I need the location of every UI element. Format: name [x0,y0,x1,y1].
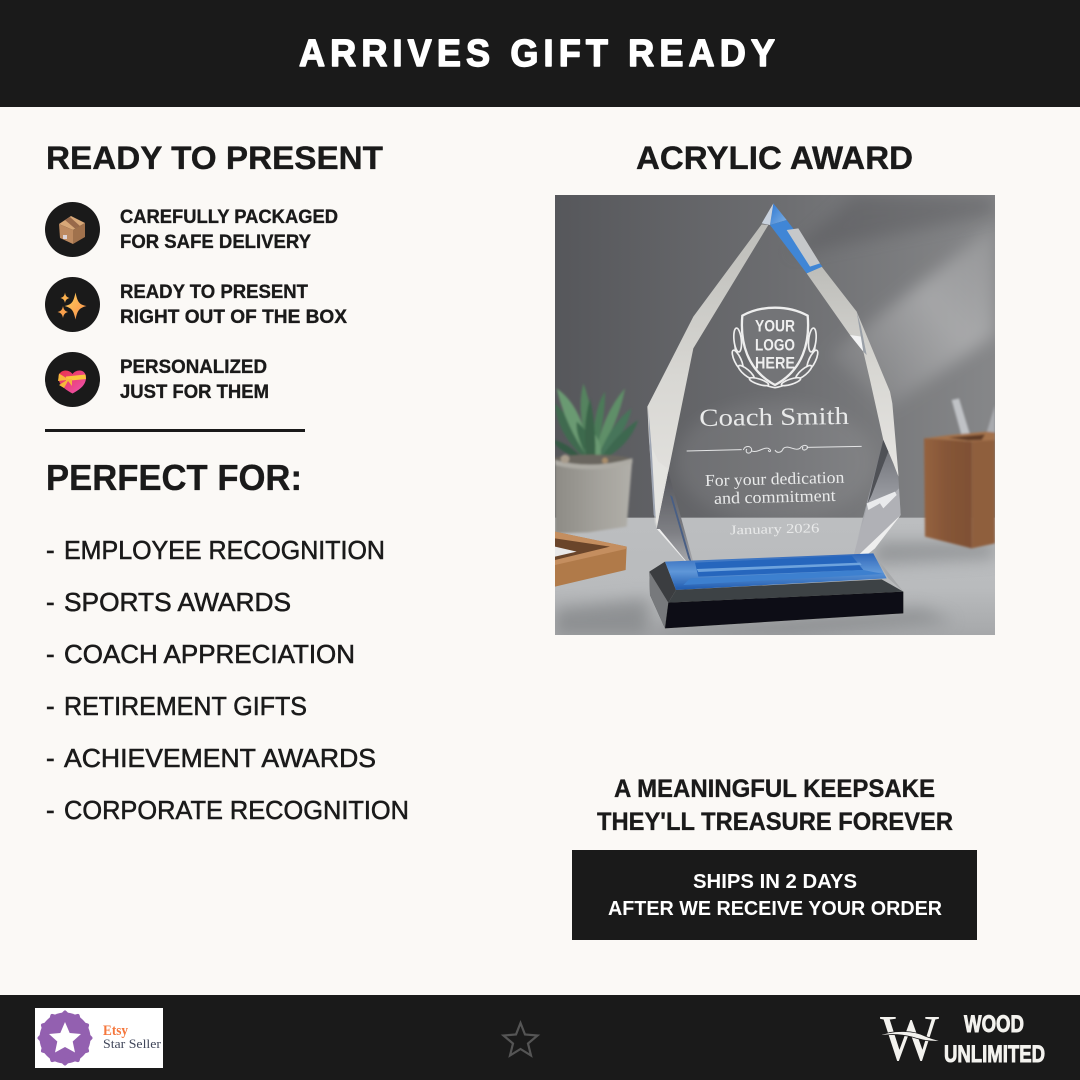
text: RIGHT OUT OF THE BOX [120,306,347,328]
feature list [45,202,347,407]
list: perfect for: - [46,795,55,825]
text [120,281,347,328]
feature: personalized [45,352,269,407]
icon: package [45,202,100,257]
list: perfect for: ACHIEVEMENT AWARDS [64,743,376,773]
text: READY TO PRESENT [120,281,308,303]
shipping callout: AFTER WE RECEIVE YOUR ORDER [608,898,943,920]
acrylic trophy [647,203,901,574]
list: perfect for: EMPLOYEE RECOGNITION [64,535,385,565]
shipping callout [572,850,977,940]
list: perfect for: - [46,743,55,773]
tagline: THEY'LL TREASURE FOREVER [597,808,953,836]
list: perfect for: - [46,535,55,565]
text: FOR SAFE DELIVERY [120,231,311,253]
text: JUST FOR THEM [120,381,269,403]
trophy base [649,553,903,628]
title: ARRIVES GIFT READY [299,31,775,74]
plant [551,383,638,533]
list: perfect for: - [46,639,55,669]
blue recess [665,553,887,590]
text: CAREFULLY PACKAGED [120,206,338,228]
logo text: LOGO [755,335,795,354]
heading: ready to present: READY TO PRESENT [46,140,383,176]
list: perfect for: SPORTS AWARDS [64,587,291,617]
list: perfect for: COACH APPRECIATION [64,639,355,669]
icon: sparkles [45,277,100,332]
right bevels [807,267,898,477]
etsy star seller badge: Etsy [103,1023,128,1039]
icon: gift heart [45,352,100,407]
blue tip [770,203,787,225]
list: perfect for [46,535,409,825]
wood unlimited logo: W [880,1002,940,1075]
list: perfect for: - [46,691,55,721]
engraved date: January 2026 [730,520,820,537]
sloped band [668,579,903,603]
wood unlimited logo: WOOD [964,1011,1024,1038]
list: perfect for: CORPORATE RECOGNITION [64,795,409,825]
table shadows [555,542,995,635]
engraved logo [730,308,820,388]
list: perfect for: RETIREMENT GIFTS [64,691,307,721]
text [120,356,269,403]
heading: acrylic award: ACRYLIC AWARD [636,140,913,176]
front [665,592,903,628]
header band [0,0,1080,107]
heading: perfect for: PERFECT FOR: [46,457,302,498]
footer band [0,995,1080,1080]
wooden tray [555,532,627,587]
tagline: A MEANINGFUL KEEPSAKE [614,775,935,803]
flourish divider [687,445,862,453]
text [120,206,338,253]
engraved message: For your dedication [705,468,845,490]
icon: center star [504,1023,538,1056]
left bevels [647,224,768,528]
shipping callout: SHIPS IN 2 DAYS [693,871,857,893]
list: perfect for: - [46,587,55,617]
logo text [755,320,795,368]
engraved name: Coach Smith [699,403,849,432]
etsy star seller badge: Star Seller [103,1036,162,1051]
pencil cup [924,398,995,548]
feature: ready to present [45,277,347,332]
etsy star seller badge [35,1008,163,1068]
engraved message [705,472,844,504]
logo text: HERE [755,353,795,372]
wood unlimited logo [878,1002,1045,1075]
text: PERSONALIZED [120,356,267,378]
left side [649,562,676,628]
logo text: YOUR [755,317,795,336]
tagline [597,775,953,836]
feature: carefully packaged [45,202,338,257]
product photo: acrylic award [551,195,995,635]
wood unlimited logo: UNLIMITED [944,1041,1045,1068]
engraved message: and commitment [714,486,836,508]
